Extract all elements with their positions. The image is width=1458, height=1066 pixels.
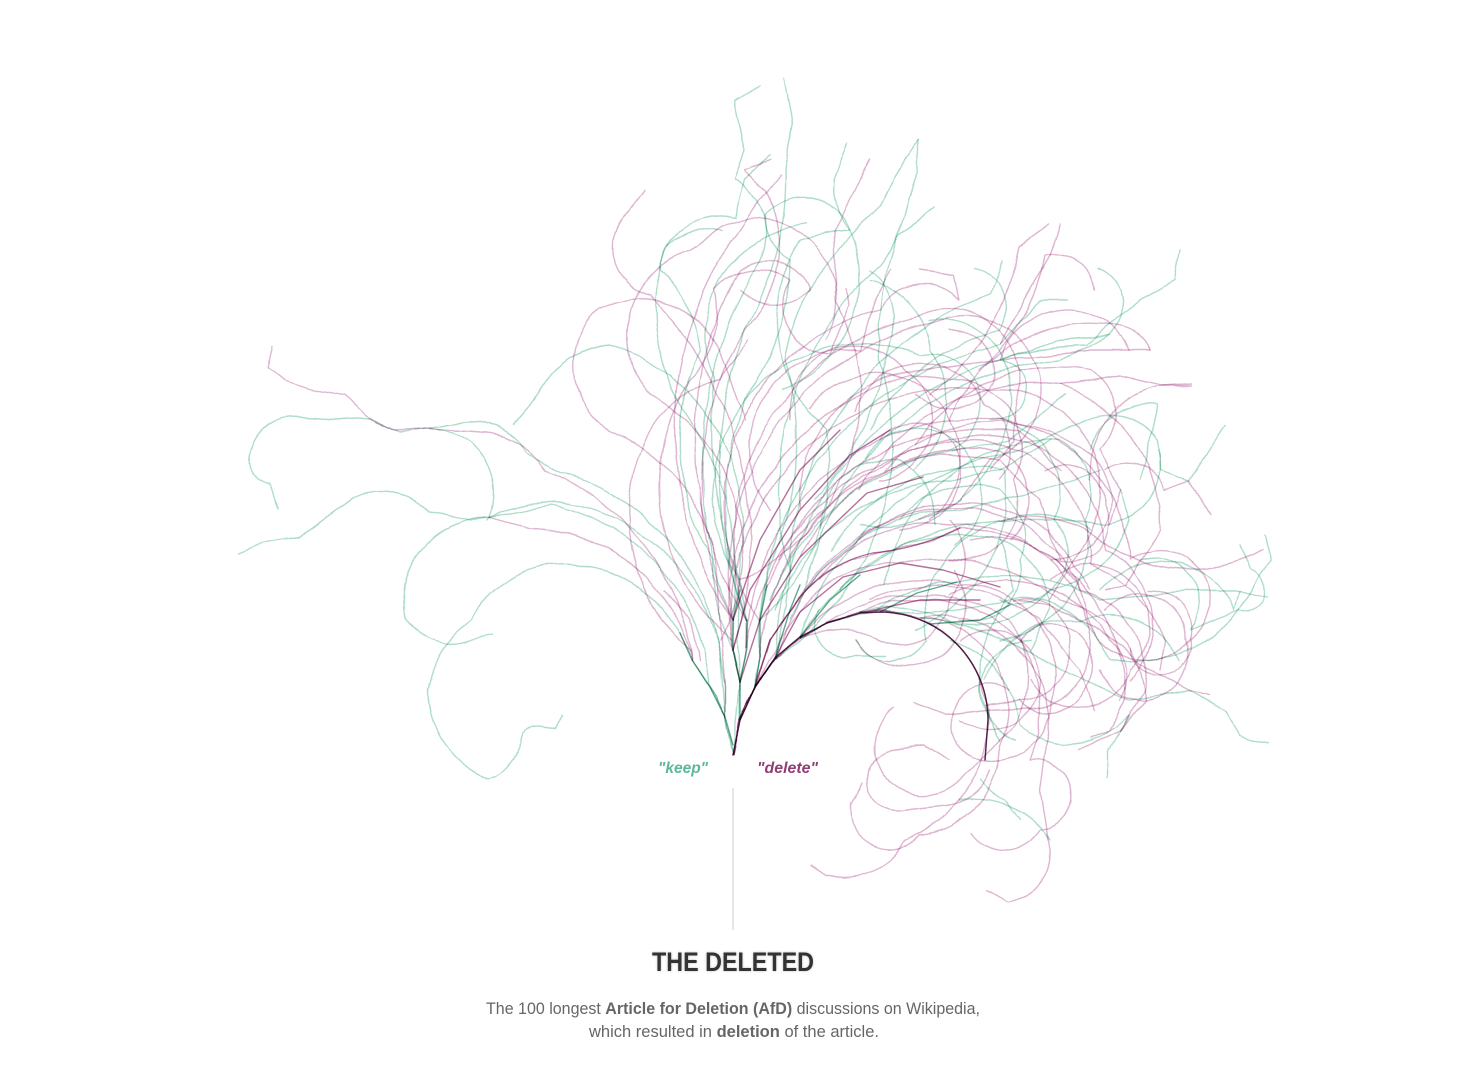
description text: The 100 longest Article for Deletion (AfD) discussions on Wikipedia, bbox=[486, 1000, 980, 1018]
discussion branches bbox=[238, 77, 1270, 902]
title: THE DELETED bbox=[652, 947, 814, 977]
dark trunk overlays bbox=[680, 430, 1010, 760]
label: delete: "delete" bbox=[757, 760, 818, 777]
trunk: mid delete limbs bbox=[733, 430, 1000, 720]
keep branches (green) bbox=[238, 77, 1270, 840]
vertical connector line bbox=[732, 788, 734, 930]
description text bbox=[486, 1000, 980, 1041]
trunk: keep limbs bbox=[680, 575, 1010, 745]
trunk: main delete stem bbox=[733, 612, 988, 760]
delete branches (purple) bbox=[268, 158, 1262, 902]
description text: which resulted in deletion of the article. bbox=[588, 1023, 879, 1041]
label: keep: "keep" bbox=[658, 760, 708, 777]
